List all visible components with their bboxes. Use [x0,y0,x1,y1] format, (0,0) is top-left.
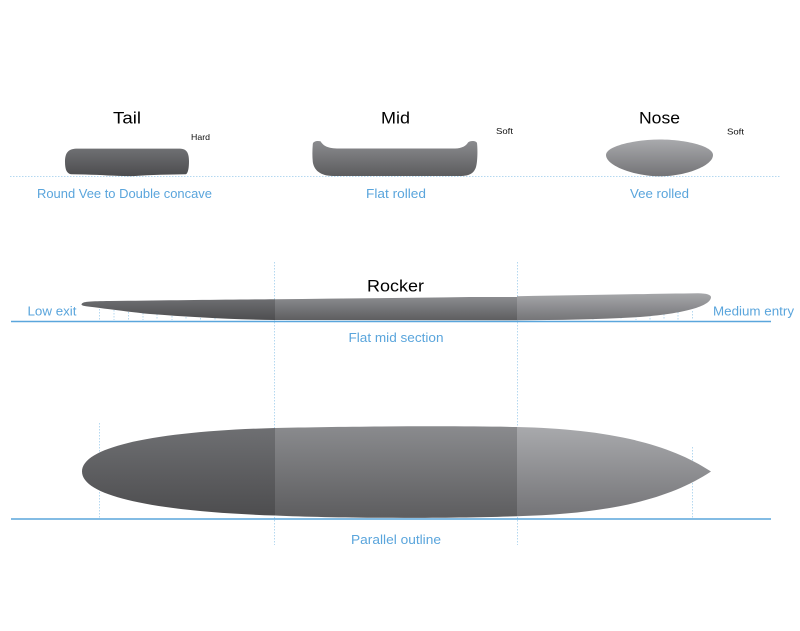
rocker baseline [11,320,771,322]
heading: Tail: Tail [113,108,141,128]
shape: mid section [312,141,477,176]
label: Flat mid section: Flat mid section [348,330,444,345]
heading: Nose: Nose [639,108,680,128]
label: Medium entry: Medium entry [713,304,795,318]
panel: outline plan view [11,423,771,547]
label: Vee rolled: Vee rolled [630,186,689,201]
heading: Rocker: Rocker [367,276,424,296]
heading: Mid: Mid [381,108,410,128]
label: Flat rolled: Flat rolled [366,186,426,201]
panel: mid cross-section [312,108,514,201]
label: Low exit: Low exit [28,304,77,318]
outline tick: tail [98,423,100,518]
shape: tail section [65,149,189,176]
label: Soft: Soft [727,126,745,136]
outline baseline [11,518,771,520]
shape: nose section [606,140,713,176]
label: Parallel outline: Parallel outline [351,532,441,547]
rocker ticks [100,309,692,320]
panel: nose cross-section [606,108,745,201]
board side profile [80,292,713,321]
label: Round Vee to Double concave: Round Vee to Double concave [37,186,212,201]
dotted baseline [10,176,781,178]
label: Soft: Soft [496,126,514,136]
section guide: right [516,262,518,545]
panel: tail cross-section [37,108,212,201]
section guide: left [274,262,276,545]
outline tick: nose [692,447,694,518]
panel: rocker profile [11,276,795,345]
board outline [80,424,713,520]
label: Hard: Hard [191,132,210,142]
